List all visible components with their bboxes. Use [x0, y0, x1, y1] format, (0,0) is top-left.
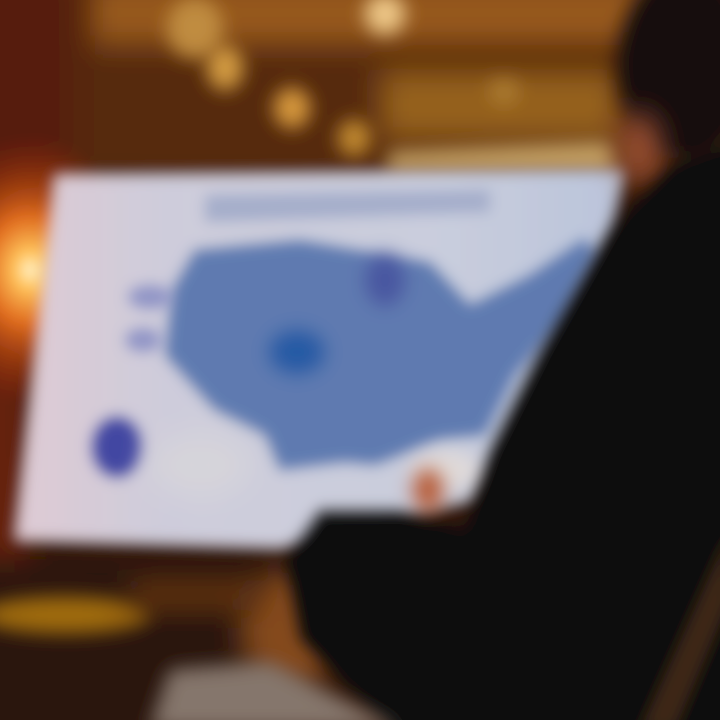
person: hand — [412, 468, 444, 512]
person: face edge — [620, 112, 660, 184]
person: head — [617, 0, 720, 160]
person: body — [285, 140, 720, 720]
ceiling lights — [167, 0, 519, 156]
person — [285, 0, 720, 720]
lower map insets — [150, 433, 480, 497]
ledge above poster — [385, 142, 620, 172]
light glow on left — [0, 135, 140, 405]
poster title — [205, 190, 490, 222]
map highlight: central region — [269, 330, 325, 374]
map highlight: north region — [365, 254, 405, 306]
small left markers — [125, 285, 172, 352]
chair edge at lower right — [640, 530, 720, 720]
map highlight: lower left inset — [92, 417, 142, 477]
keyboard / light surface at bottom — [150, 662, 400, 720]
poster panel — [15, 170, 625, 548]
lower left table highlight — [0, 580, 260, 633]
US map — [165, 238, 595, 470]
